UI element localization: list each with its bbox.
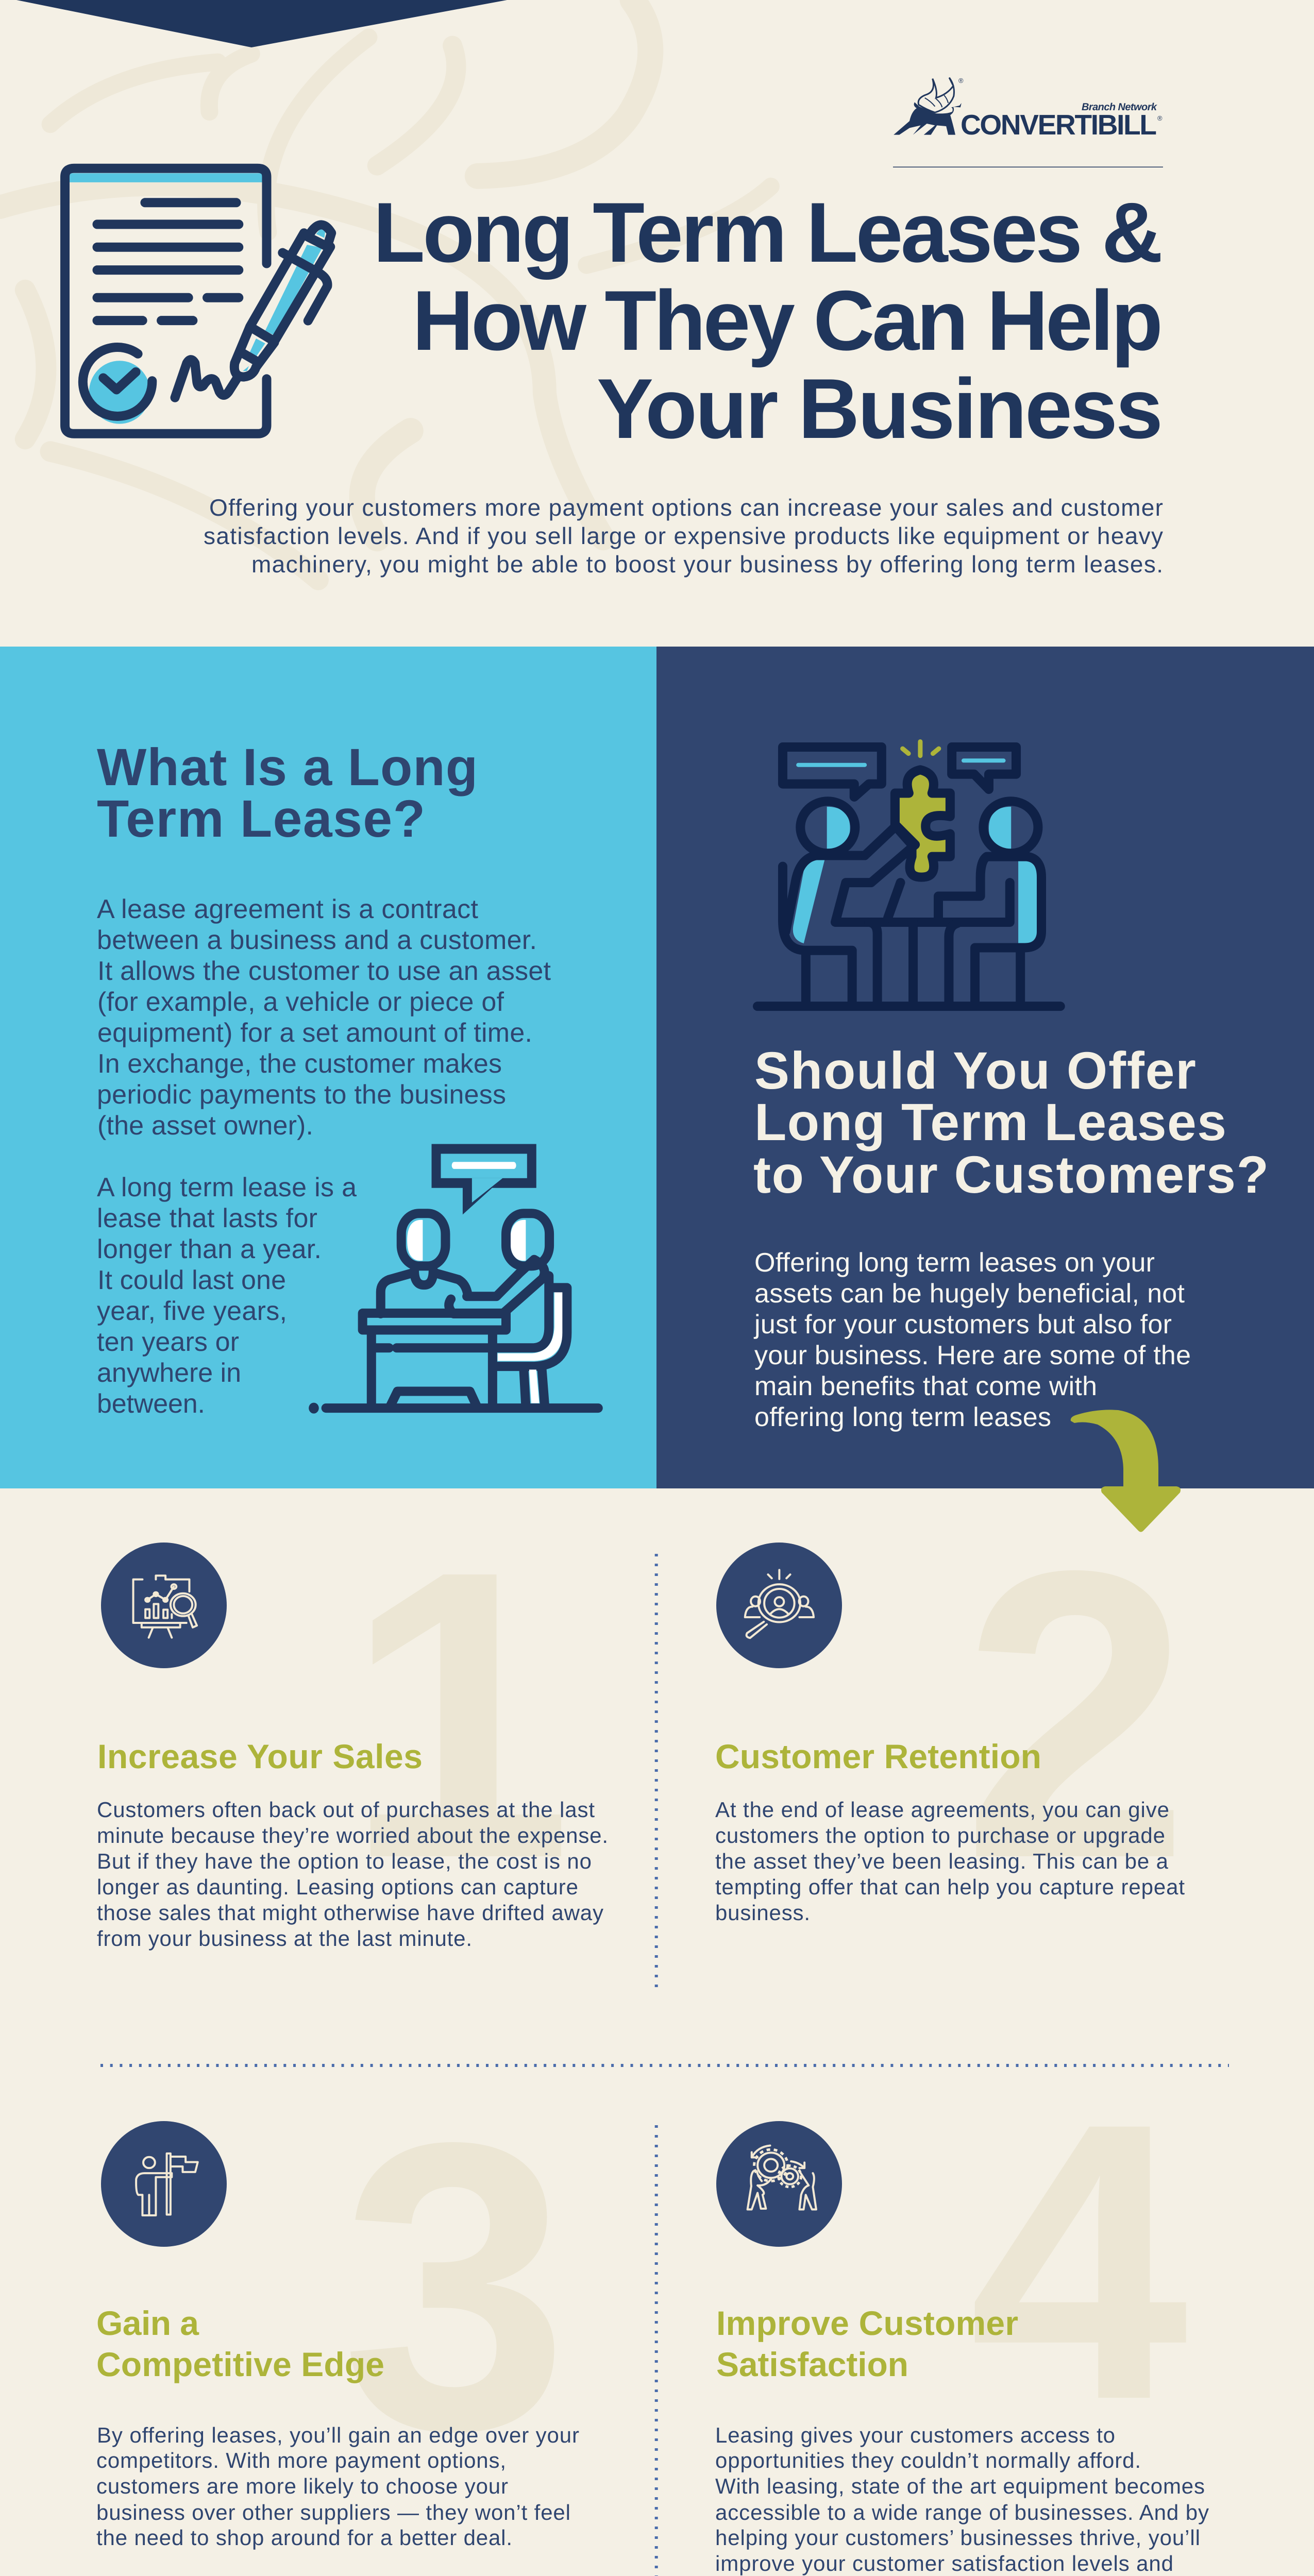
- icon: signed document with pen: [65, 168, 331, 434]
- paragraph: long term: It could last one: [97, 1265, 286, 1295]
- heading: [716, 2304, 1018, 2383]
- paragraph: definition: (for example, a vehicle or piece of: [97, 987, 504, 1017]
- heading: Term Lease?: [97, 789, 425, 848]
- icon: two people with puzzle piece: [757, 741, 1060, 1006]
- paragraph: just for your customers but also for: [753, 1310, 1172, 1340]
- body: helping your customers’ businesses thrive, you’ll: [715, 2526, 1200, 2550]
- logo: Convertibill: ®: [1157, 114, 1163, 122]
- paragraph: your business. Here are some of the: [754, 1341, 1191, 1370]
- heading: What Is a Long: [97, 738, 478, 796]
- body: customers the option to purchase or upgrade: [715, 1823, 1165, 1848]
- body: improve your customer satisfaction levels and: [715, 2551, 1173, 2575]
- paragraph: long term: A long term lease is a: [97, 1173, 357, 1202]
- body: business over other suppliers — they won’t feel: [96, 2500, 570, 2524]
- body: With leasing, state of the art equipment becomes: [715, 2474, 1205, 2498]
- heading: [96, 2304, 384, 2383]
- paragraph: long term: anywhere in: [97, 1358, 241, 1388]
- dotted dividers: [100, 1554, 1229, 2576]
- intro text: Offering your customers more payment options can increase your sales and customer: [209, 494, 1163, 521]
- body: competitors. With more payment options,: [96, 2448, 506, 2472]
- icon: customer search: [716, 1543, 842, 1668]
- number 3: 3: [341, 2058, 569, 2515]
- title: [373, 185, 1163, 456]
- body: those sales that might otherwise have drifted away: [97, 1901, 603, 1925]
- paragraph: assets can be hugely beneficial, not: [754, 1279, 1185, 1309]
- paragraph: long term: between.: [97, 1389, 205, 1419]
- body: customers are more likely to choose your: [96, 2474, 508, 2498]
- body: business.: [715, 1901, 810, 1925]
- title: How They Can Help: [412, 273, 1163, 368]
- body: minute because they’re worried about the expense.: [97, 1823, 608, 1848]
- body: [715, 2423, 1209, 2576]
- body: tempting offer that can help you capture repeat: [715, 1875, 1185, 1899]
- paragraph: main benefits that come with: [754, 1371, 1097, 1401]
- intro text: satisfaction levels. And if you sell large or expensive products like equipment or heavy: [204, 522, 1163, 549]
- paragraph: long term: ten years or: [97, 1327, 239, 1357]
- logo: Convertibill: Branch Network: [1082, 101, 1157, 113]
- logo: Convertibill: ®: [958, 77, 964, 84]
- icon: person with flag: [101, 2121, 227, 2247]
- paragraph: long term: lease that lasts for: [97, 1204, 317, 1233]
- logo: Convertibill: [894, 77, 1163, 141]
- paragraph: long term: longer than a year.: [97, 1234, 322, 1264]
- heading: Increase Your Sales: [97, 1737, 423, 1775]
- body: [715, 1798, 1185, 1925]
- title: Your Business: [597, 361, 1163, 456]
- panel: what is a long term lease: [0, 647, 658, 1488]
- body: accessible to a wide range of businesses. And by: [715, 2500, 1209, 2524]
- icon: presentation chart: [101, 1543, 227, 1668]
- paragraph: definition: (the asset owner).: [97, 1111, 313, 1141]
- body: longer as daunting. Leasing options can capture: [97, 1875, 578, 1899]
- number 2: 2: [962, 1486, 1190, 1943]
- benefit 3: competitive edge: [96, 2058, 579, 2550]
- body: Leasing gives your customers access to: [715, 2423, 1115, 2447]
- paragraph: Offering long term leases on your: [754, 1248, 1155, 1278]
- number 1: 1: [345, 1486, 572, 1943]
- heading: Satisfaction: [716, 2345, 908, 2383]
- benefit 2: customer retention: [715, 1486, 1190, 1943]
- benefit 1: increase your sales: [97, 1486, 608, 1951]
- heading: Customer Retention: [715, 1737, 1041, 1775]
- heading: Gain a: [96, 2304, 199, 2342]
- paragraph: definition: periodic payments to the business: [97, 1080, 506, 1110]
- paragraph: long term: [97, 1173, 357, 1419]
- logo: Convertibill: CONVERTIBILL: [961, 109, 1157, 141]
- heading: to Your Customers?: [753, 1145, 1269, 1204]
- benefit 4: improve customer satisfaction: [715, 2041, 1209, 2576]
- body: At the end of lease agreements, you can give: [715, 1798, 1169, 1822]
- body: from your business at the last minute.: [97, 1926, 472, 1951]
- paragraph: definition: In exchange, the customer makes: [97, 1049, 502, 1079]
- body: [97, 1798, 608, 1951]
- body: the asset they’ve been leasing. This can be a: [715, 1849, 1169, 1873]
- body: opportunities they couldn’t normally afford.: [715, 2448, 1141, 2472]
- paragraph: definition: equipment) for a set amount of time.: [97, 1018, 532, 1048]
- intro text: machinery, you might be able to boost your business by offering long term leases.: [251, 551, 1163, 578]
- body: By offering leases, you’ll gain an edge over your: [97, 2423, 579, 2447]
- paragraph: offering long term leases: [754, 1402, 1051, 1432]
- body: the need to shop around for a better deal.: [96, 2526, 512, 2550]
- chevron: [0, 0, 507, 47]
- paragraph: definition: [97, 894, 551, 1141]
- icon: two people at desk: [309, 1144, 598, 1414]
- icon: people moving gears: [716, 2121, 842, 2247]
- paragraph: definition: between a business and a customer.: [97, 925, 537, 955]
- title: Long Term Leases &: [373, 185, 1163, 280]
- body: But if they have the option to lease, the cost is no: [97, 1849, 592, 1873]
- paragraph: [753, 1248, 1191, 1432]
- arrow: [1071, 1410, 1181, 1532]
- heading: Long Term Leases: [754, 1093, 1226, 1151]
- intro text: [204, 494, 1163, 578]
- heading: Should You Offer: [754, 1041, 1196, 1100]
- heading: [753, 1041, 1269, 1204]
- heading: Competitive Edge: [96, 2345, 384, 2383]
- heading: [97, 738, 478, 848]
- number 4: 4: [969, 2041, 1191, 2482]
- paragraph: definition: It allows the customer to use an asset: [97, 956, 551, 986]
- heading: Improve Customer: [716, 2304, 1018, 2342]
- paragraph: long term: year, five years,: [97, 1296, 287, 1326]
- body: [96, 2423, 579, 2550]
- body: Customers often back out of purchases at the last: [97, 1798, 595, 1822]
- panel: should you offer: [656, 647, 1314, 1488]
- panel: header: [0, 0, 1163, 580]
- paragraph: definition: A lease agreement is a contract: [97, 894, 479, 924]
